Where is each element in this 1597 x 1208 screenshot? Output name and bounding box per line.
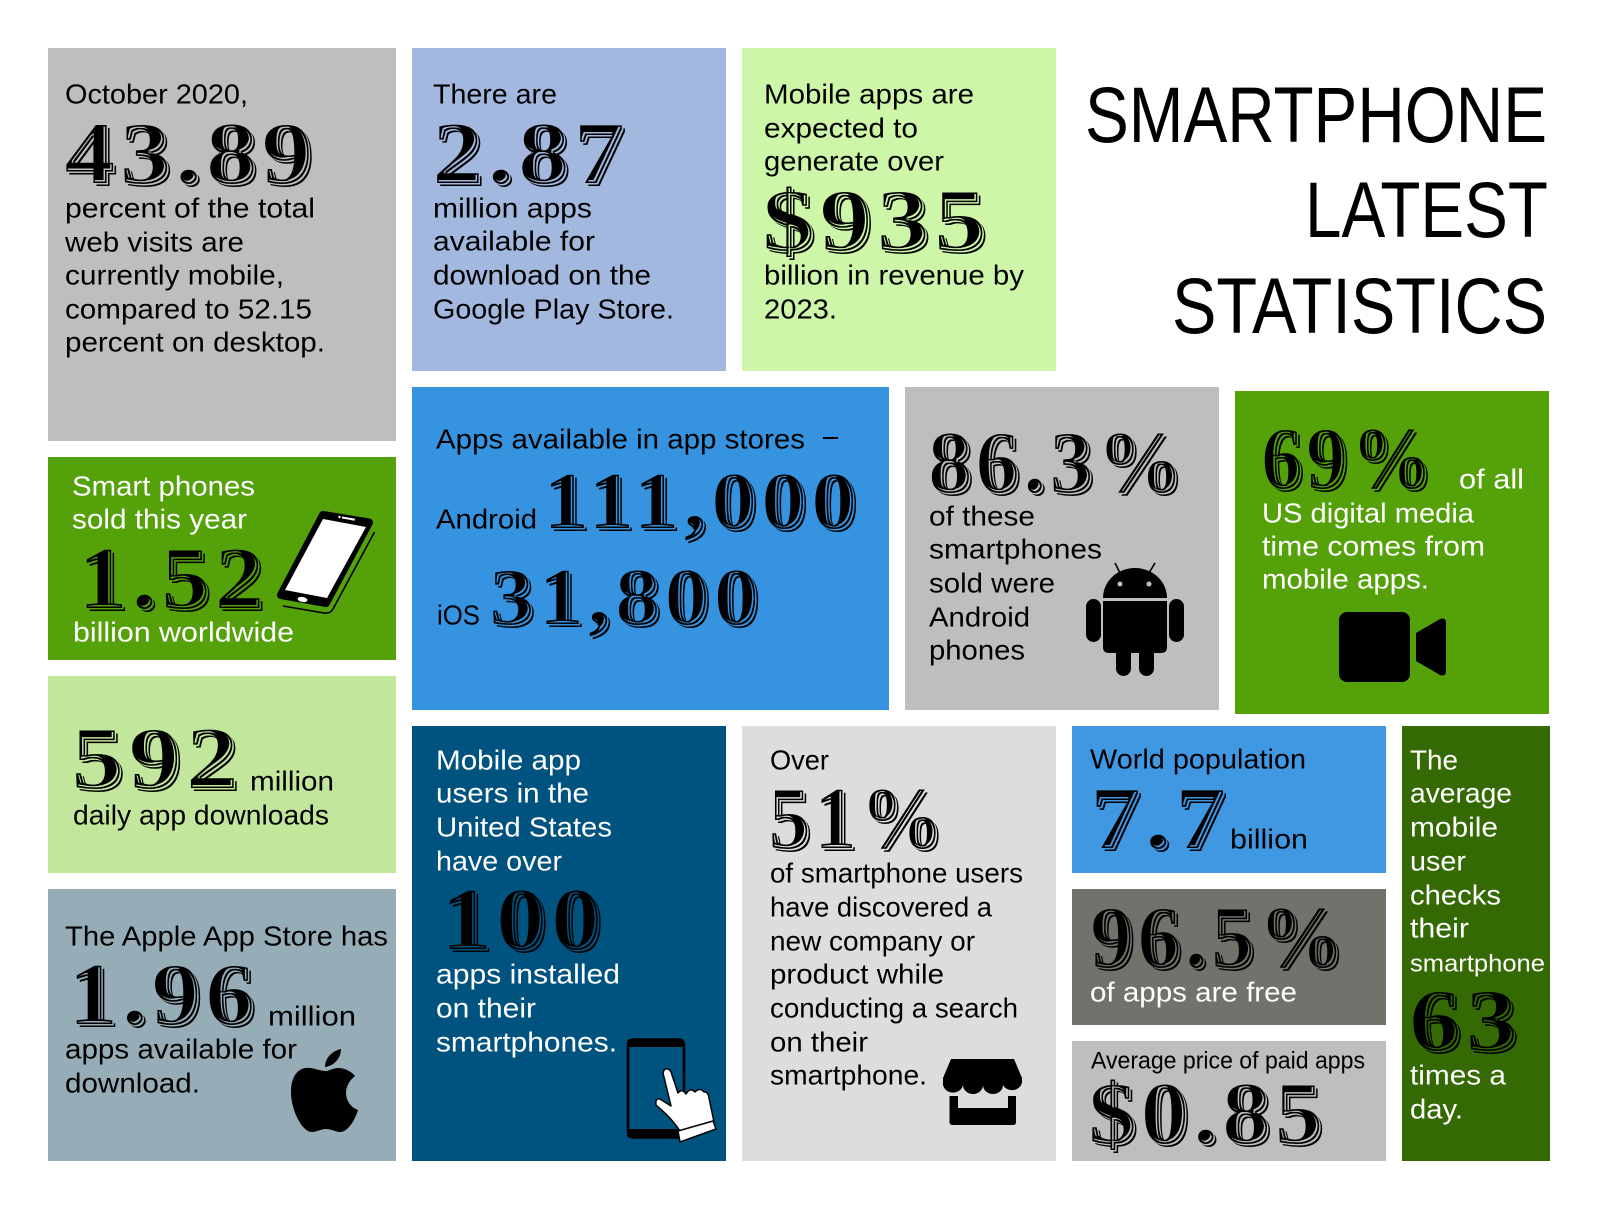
- icon: android robot: [1086, 563, 1184, 676]
- text: smart phones sold: sold this year: [72, 504, 247, 535]
- panel: Apple App Store: [48, 889, 396, 1161]
- title: LATEST: [1305, 165, 1548, 254]
- number: 592: 592: [72, 711, 244, 808]
- text: mobile app users: [436, 745, 612, 877]
- text: Android: Android: [436, 504, 537, 535]
- panel: apps in app stores: [412, 387, 889, 710]
- number: 2.87: 2.87: [433, 106, 630, 203]
- number: $935: $935: [763, 173, 992, 270]
- text: of smartphone users: smartphone.: [770, 1060, 927, 1091]
- number: 96.5%: 96.5%: [1091, 890, 1349, 987]
- number: 63: 63: [1410, 973, 1523, 1070]
- text: times a day: [1410, 1060, 1506, 1125]
- icon: tilted smartphone: [281, 515, 374, 613]
- text: million apps available: available for: [433, 226, 595, 257]
- text: mobile app users: United States: [436, 812, 612, 843]
- text: of smartphone users: have discovered a: [770, 892, 992, 923]
- number: 1.96: 1.96: [69, 947, 260, 1044]
- text: of smartphone users: new company or: [770, 926, 975, 957]
- number: $0.85: $0.85: [1089, 1066, 1328, 1163]
- text: There are: There are: [433, 79, 557, 110]
- icon: hand tapping phone: [627, 1039, 716, 1142]
- text: of all US digital media: of all: [1459, 464, 1524, 495]
- text: World population: World population: [1090, 744, 1306, 775]
- panel: smartphone search discovery: [742, 726, 1056, 1161]
- text: of these smartphones: [929, 501, 1102, 666]
- text: million apps available: Google Play Store.: [433, 294, 674, 325]
- panel: Android share: [905, 387, 1219, 710]
- text: smart phones sold: [72, 471, 255, 535]
- text: apps installed: [436, 959, 620, 1058]
- text: million daily app downloads: daily app downloads: [73, 800, 329, 831]
- text: million apps available: [433, 193, 674, 325]
- text: mobile app users: Mobile app: [436, 745, 581, 776]
- number: 51%: 51%: [769, 771, 948, 868]
- text: of all US digital media: time comes from: [1262, 531, 1485, 562]
- text: average mobile user: checks: [1410, 880, 1501, 911]
- number: 31,800: 31,800: [490, 554, 764, 642]
- panel: US digital media time: [1235, 391, 1549, 714]
- text: average mobile user: their: [1410, 913, 1469, 944]
- text: million apps available: download.: [65, 1068, 200, 1099]
- text: mobile app users: users in the: [436, 778, 589, 809]
- text: Over: Over: [770, 745, 829, 776]
- text: of smartphone users: product while: [770, 959, 944, 990]
- text: million apps available: million apps: [433, 193, 592, 224]
- text: billion worldwide: billion worldwide: [73, 617, 294, 648]
- text: percent of web visits: [64, 193, 325, 358]
- text: of these smartphones: sold were: [929, 568, 1055, 599]
- text: average mobile user: mobile: [1410, 812, 1498, 843]
- dash: [823, 437, 838, 439]
- text: of smartphone users: on their: [770, 1027, 868, 1058]
- text: percent of web visits: web visits are: [64, 227, 244, 258]
- text: average mobile user: user: [1410, 846, 1466, 877]
- text: mobile app users: have over: [436, 846, 562, 877]
- number: 7.7: 7.7: [1091, 771, 1231, 868]
- text: million daily app downloads: [73, 766, 334, 831]
- text: smart phones sold: Smart phones: [72, 471, 255, 502]
- panel: revenue: [742, 48, 1056, 371]
- text: percent of web visits: compared to 52.15: [65, 294, 312, 325]
- text: average mobile user: smartphone: [1410, 951, 1545, 978]
- text: billion in revenue: 2023.: [764, 294, 837, 325]
- panel: daily checks: [1402, 726, 1550, 1161]
- text: of all US digital media: mobile apps.: [1262, 564, 1429, 595]
- title: [1085, 70, 1548, 350]
- number: 69%: 69%: [1262, 411, 1437, 508]
- text: of these smartphones: phones: [929, 635, 1025, 666]
- text: percent of web visits: currently mobile,: [65, 260, 284, 291]
- panel: world population: [1072, 726, 1386, 873]
- number: 100: 100: [442, 872, 607, 969]
- text: apps installed: apps installed: [436, 959, 620, 990]
- text: million apps available: million: [268, 1001, 356, 1032]
- text: of these smartphones: Android: [929, 602, 1030, 633]
- number: 111,000: 111,000: [544, 458, 862, 546]
- text: apps installed: on their: [436, 993, 536, 1024]
- text: billion in revenue: billion in revenue by: [764, 260, 1024, 291]
- panel: daily downloads: [48, 676, 396, 873]
- text: percent of web visits: percent on desktop.: [65, 327, 325, 358]
- text: million apps available: apps available for: [65, 1034, 297, 1065]
- text: average mobile user: The: [1410, 745, 1458, 776]
- text: iOS: iOS: [437, 600, 480, 631]
- text: mobile apps expected: generate over: [764, 146, 944, 177]
- text: of all US digital media: [1262, 464, 1524, 595]
- text: of all US digital media: US digital media: [1262, 498, 1474, 529]
- text: of smartphone users: [770, 858, 1023, 1091]
- number: 43.89: 43.89: [65, 106, 318, 203]
- panel: Google Play apps: [412, 48, 726, 371]
- text: The Apple App Store has: The Apple App Store has: [65, 921, 388, 952]
- text: of smartphone users: of smartphone users: [770, 858, 1023, 889]
- text: billion: billion: [1230, 824, 1308, 855]
- text: million daily app downloads: million: [250, 766, 334, 797]
- icon: apple logo: [291, 1049, 358, 1132]
- text: percent of web visits: percent of the total: [65, 193, 315, 224]
- text: October 2020: October 2020,: [65, 79, 248, 110]
- text: average price: Average price of paid apps: [1091, 1048, 1365, 1075]
- panel: free apps: [1072, 889, 1386, 1025]
- text: average mobile user: [1410, 745, 1545, 978]
- text: apps installed: smartphones.: [436, 1027, 617, 1058]
- text: million apps available: download on the: [433, 260, 651, 291]
- text: of these smartphones: of these: [929, 501, 1035, 532]
- text: of apps are free: of apps are free: [1090, 977, 1297, 1008]
- panel: average paid price: [1072, 1041, 1386, 1163]
- text: of these smartphones: smartphones: [929, 534, 1102, 565]
- number: 86.3%: 86.3%: [929, 415, 1188, 512]
- text: billion in revenue: [764, 260, 1024, 325]
- text: mobile apps expected: expected to: [764, 113, 918, 144]
- number: 1.52: 1.52: [79, 531, 269, 628]
- panel: US app users: [412, 726, 726, 1161]
- text: average mobile user: average: [1410, 778, 1512, 809]
- text: mobile apps expected: [764, 79, 974, 177]
- text: apps available heading: Apps available in app stores: [436, 424, 805, 455]
- text: mobile apps expected: Mobile apps are: [764, 79, 974, 110]
- icon: video camera: [1339, 612, 1446, 682]
- panel: smart phones sold: [48, 457, 396, 660]
- text: million apps available: [65, 1001, 356, 1099]
- panel: mobile web visits: [48, 48, 396, 441]
- text: times a day: times a: [1410, 1060, 1506, 1091]
- text: of smartphone users: conducting a search: [770, 993, 1018, 1024]
- icon: storefront: [943, 1059, 1022, 1125]
- text: times a day: day.: [1410, 1094, 1463, 1125]
